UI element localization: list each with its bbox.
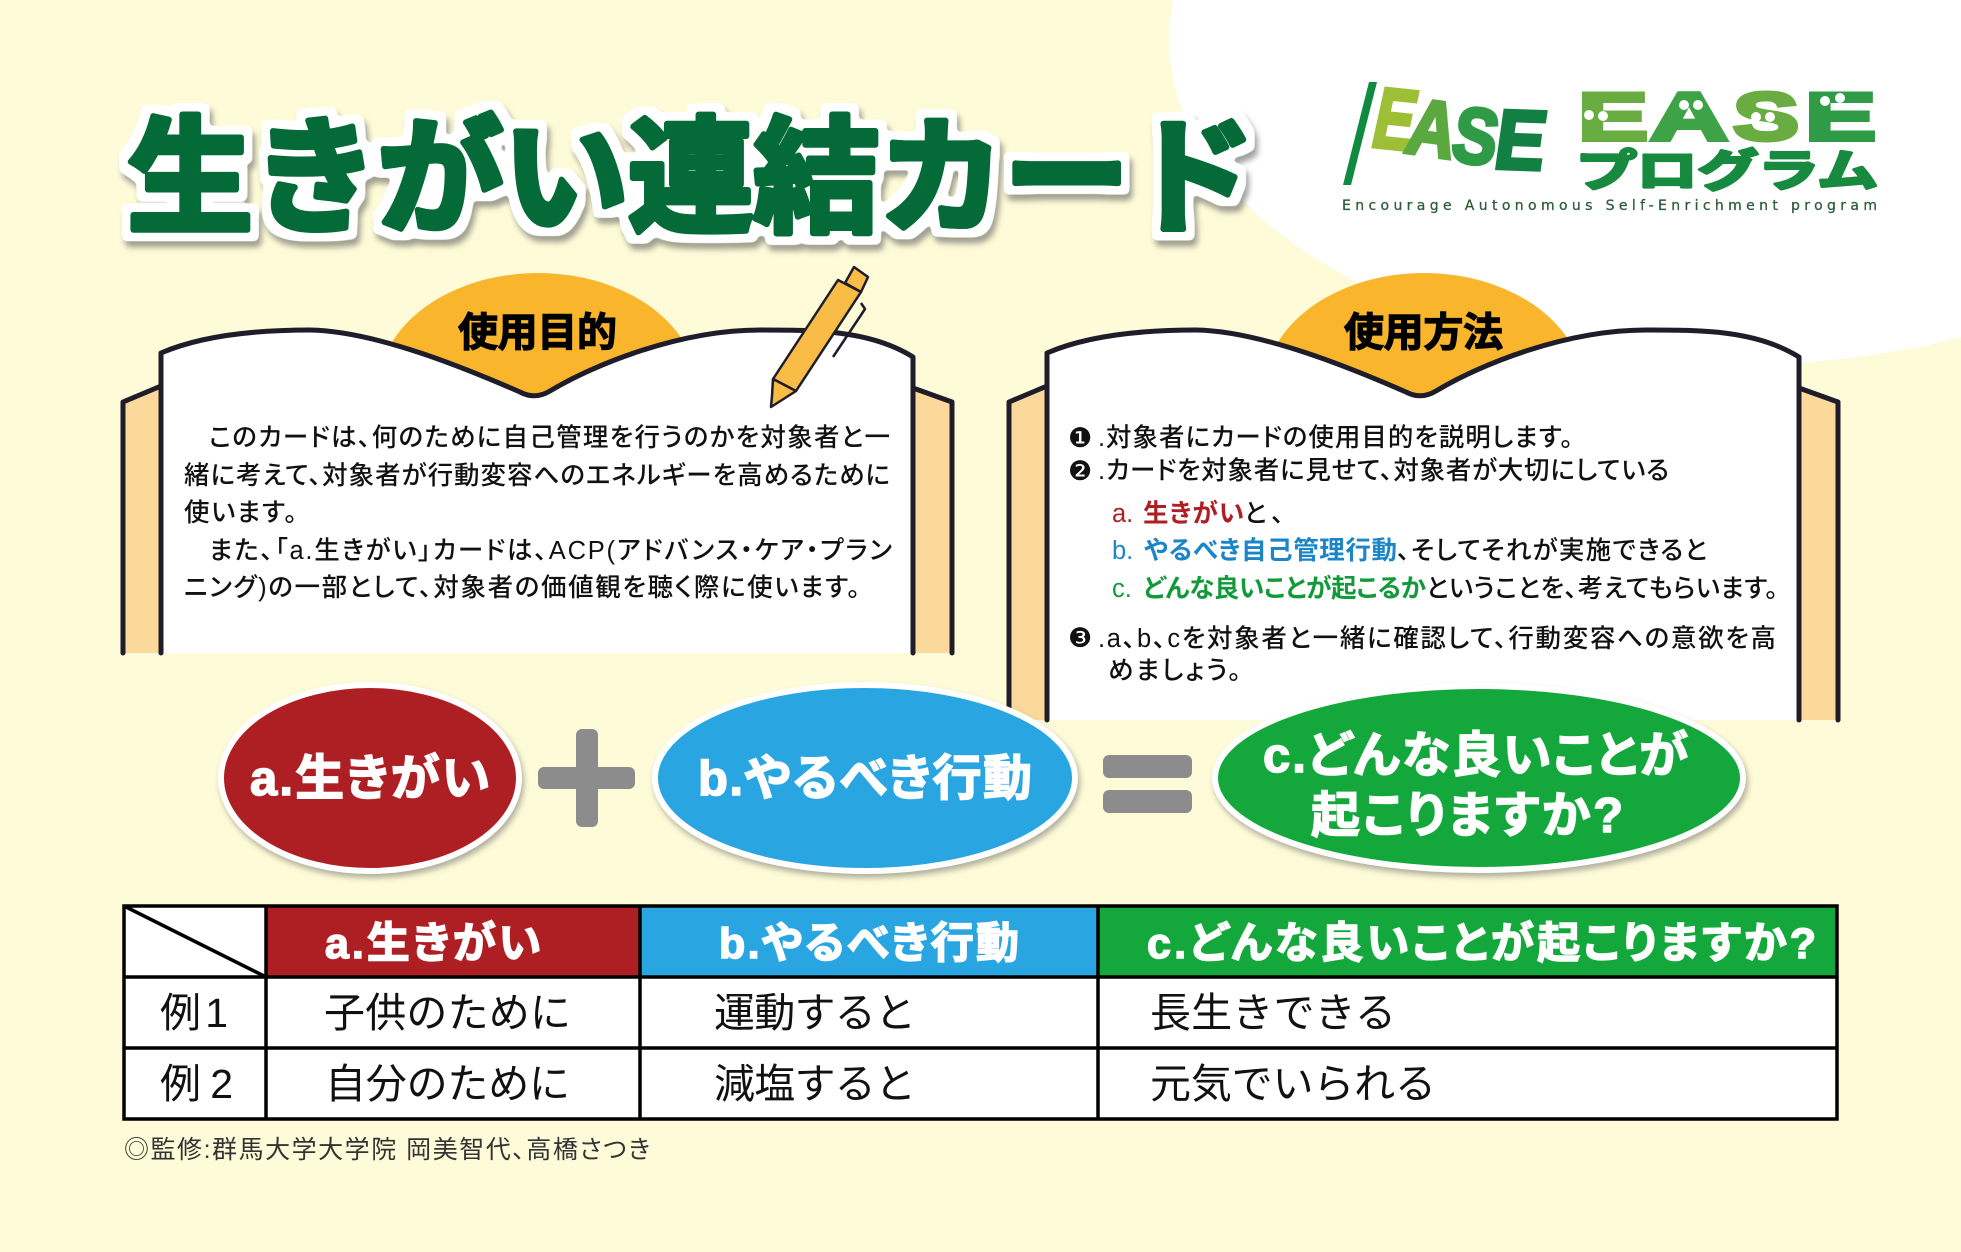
header: a: a.生きがい [325,920,541,968]
oval: c [1215,686,1743,870]
header: c [1098,906,1837,977]
oval: b: b.やるべき行動 [698,752,1032,806]
row: example 2: 自分のために [325,1061,570,1107]
logo: EASE program: A [1650,79,1728,155]
header: b: b.やるべき行動 [719,920,1019,968]
header: a [266,906,640,977]
header: c: c.どんな良いことが起こりますか? [1147,920,1816,968]
heading: method: 使用方法 [1344,311,1503,355]
table [124,906,1837,1119]
method body text: 生きがい [1143,499,1244,528]
logo: EASE flag: S [1446,90,1506,183]
method body text: .a、b、cを対象者と一緒に確認して、行動変容への意欲を高 [1098,625,1776,653]
oval: a [221,685,519,871]
method body text: めましょう。 [1108,657,1241,685]
panel: purpose book [123,267,952,653]
logo: EASE flag: E [1365,71,1425,169]
method body text: と、 [1244,500,1284,528]
logo: EASE program: E [1805,79,1876,155]
oval: a: a.生きがい [250,752,490,806]
purpose body text: 使います。 [184,499,297,527]
table cells background [124,906,1837,1119]
row: example 2: 例2 [160,1061,233,1107]
row: example 1: 子供のために [324,990,571,1036]
logo: EASE program: Encourage Autonomous Self-Enrichment program [1342,198,1877,214]
row: example 1: 例1 [160,990,228,1036]
white corner shape [1169,0,1961,365]
oval: c: c.どんな良いことが [1263,729,1688,783]
method body text: 、そしてそれが実施できると [1397,537,1707,565]
method body text: a. [1112,500,1133,528]
row: example 1 [160,990,1396,1036]
heading tab: method [1264,273,1584,507]
supervision note: ◎監修:群馬大学大学院 岡美智代、高橋さつき [124,1136,650,1164]
logo: EASE flag [1343,71,1553,188]
method body text: ということを、考えてもらいます。 [1426,575,1778,603]
book main page [161,330,913,653]
logo: EASE program [1342,79,1878,214]
row: example 2: 元気でいられる [1150,1061,1436,1107]
purpose body text: ニング)の一部として、対象者の価値観を聴く際に使います。 [184,574,860,602]
purpose body text [184,424,892,602]
icon: plus [538,729,635,827]
row: example 2 [160,1061,1436,1107]
purpose body text: 緒に考えて、対象者が行動変容へのエネルギーを高めるために [184,462,890,490]
row: example 2: 減塩すると [714,1061,916,1107]
book main page [1047,330,1799,720]
logo: EASE program: S [1733,79,1799,155]
method body text: やるべき自己管理行動 [1143,537,1397,565]
logo: EASE flag: E [1489,93,1553,188]
logo: EASE flag: A [1399,81,1466,175]
heading tab: purpose [378,273,698,507]
oval: b [655,685,1075,871]
logo: EASE program: プログラム [1576,147,1878,196]
purpose body text: このカードは、何のために自己管理を行うのかを対象者と一 [209,424,890,452]
book side pages [123,386,952,653]
header: b [640,906,1098,977]
heading: purpose: 使用目的 [458,311,617,355]
method body text: c. [1112,575,1132,603]
method body text: .カードを対象者に見せて、対象者が大切にしている [1098,457,1669,485]
row: example 1: 運動すると [714,990,916,1036]
book side pages [1009,386,1838,720]
purpose body text: また、「a.生きがい」カードは、ACP(アドバンス・ケア・プラン [209,537,892,565]
method body text: どんな良いことが起こるか [1143,574,1427,603]
method body text: b. [1112,537,1133,565]
panel: method book [1009,273,1838,720]
method body text: .対象者にカードの使用目的を説明します。 [1098,424,1573,452]
method body text: ❷ [1068,456,1092,487]
icon: pen [771,267,868,407]
method body text [1068,423,1778,685]
logo: EASE program: E [1578,79,1648,155]
title: 生きがい連結カード [127,108,1255,249]
oval: c: 起こりますか? [1311,789,1623,843]
method body text: ❸ [1068,623,1092,654]
row: example 1: 長生きできる [1150,990,1396,1036]
method body text: ❶ [1068,423,1092,454]
icon: equals [1103,755,1192,813]
